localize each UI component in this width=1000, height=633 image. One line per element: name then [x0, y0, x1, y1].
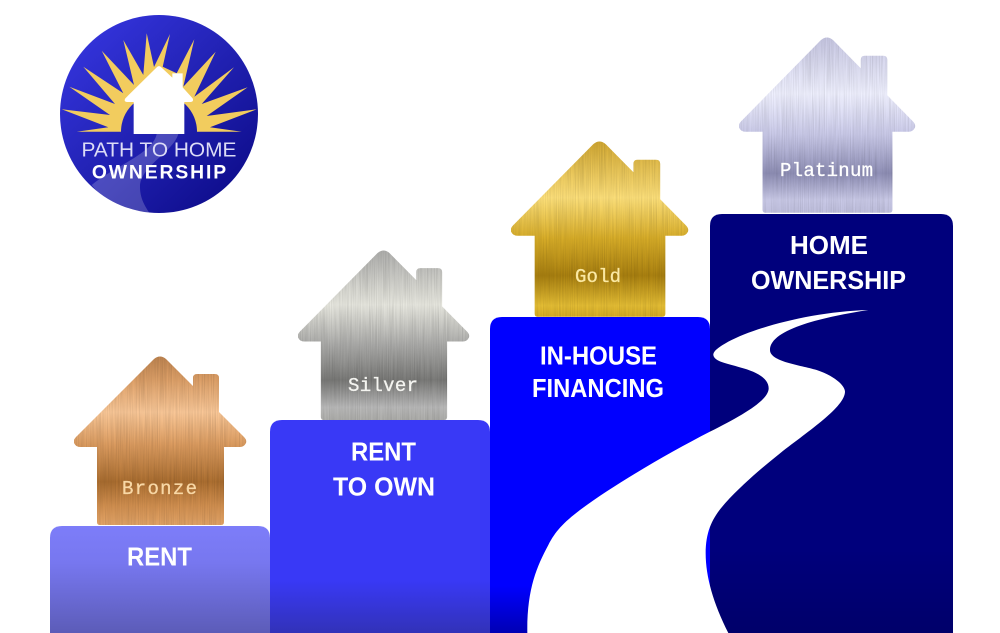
- house: platinum: Platinum: [780, 160, 873, 182]
- logo sunburst: [62, 33, 257, 132]
- bar: in-house financing: [490, 317, 710, 633]
- label: rent: RENT: [127, 542, 192, 572]
- label: in-house financing: IN-HOUSE: [540, 340, 657, 370]
- logo text: OWNERSHIP: [92, 162, 226, 183]
- bar: rent to own: [270, 420, 490, 633]
- house: platinum: [739, 37, 916, 214]
- label: home ownership: [751, 230, 906, 295]
- label: in-house financing: FINANCING: [532, 373, 664, 403]
- logo text: [81, 139, 236, 183]
- logo path band: [92, 134, 178, 217]
- logo text: PATH TO HOME: [81, 139, 236, 162]
- label: home ownership: OWNERSHIP: [751, 265, 906, 295]
- bar: home ownership: [710, 214, 953, 633]
- logo house: [125, 66, 193, 134]
- label: in-house financing: [532, 340, 664, 403]
- label: rent to own: [333, 436, 435, 502]
- label: rent to own: RENT: [351, 436, 416, 466]
- house: bronze: [74, 356, 247, 526]
- house: silver: Silver: [348, 375, 418, 397]
- house: gold: [511, 141, 689, 318]
- house: bronze: Bronze: [122, 478, 197, 500]
- label: home ownership: HOME: [790, 230, 868, 260]
- logo: path to home ownership badge: [60, 15, 258, 217]
- house: gold: Gold: [575, 266, 621, 288]
- winding white path: [527, 310, 868, 633]
- house: silver: [298, 250, 470, 421]
- label: rent to own: TO OWN: [333, 472, 435, 502]
- bar: rent: [50, 526, 270, 633]
